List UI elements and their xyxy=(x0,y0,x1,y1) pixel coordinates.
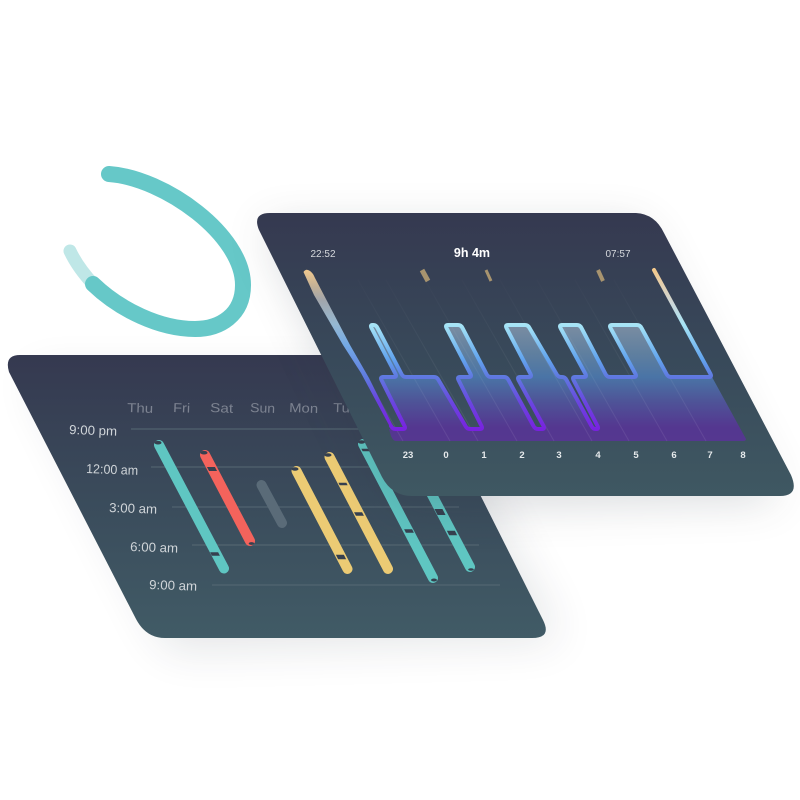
panel shadow: bottom panel xyxy=(30,375,560,650)
panel shadow: top panel xyxy=(262,225,780,510)
horizontal time grid lines xyxy=(131,429,500,585)
sleep stage area fill xyxy=(371,325,746,441)
wake time label: 07:57 xyxy=(605,249,631,260)
time axis labels: 9:00 pm xyxy=(69,422,117,439)
time axis labels: 12:00 am xyxy=(86,461,138,478)
time axis labels xyxy=(69,422,197,594)
bar: Friday red xyxy=(200,451,254,545)
awake tick marks xyxy=(422,270,603,281)
ring solid arc xyxy=(93,174,243,329)
weekday labels: Mon xyxy=(289,400,318,416)
time axis labels: 3:00 am xyxy=(109,500,157,517)
hour axis labels: 0 xyxy=(443,450,449,461)
time axis labels: 6:00 am xyxy=(130,539,178,556)
weekday labels: Thu xyxy=(127,400,153,416)
weekday labels xyxy=(127,400,358,416)
bar: Sunday grey nap xyxy=(262,485,282,523)
hour axis labels: 6 xyxy=(671,450,677,461)
icon: teal ring progress arc xyxy=(70,174,243,329)
bar: Thursday teal xyxy=(154,441,224,568)
hour axis labels xyxy=(403,450,746,461)
hour axis labels: 7 xyxy=(707,450,713,461)
bar: Wednesday teal xyxy=(358,440,437,582)
hour axis labels: 23 xyxy=(403,450,413,461)
weekday labels: Fri xyxy=(173,400,191,416)
hour axis labels: 1 xyxy=(481,450,487,461)
duration label: 9h 4m xyxy=(454,246,490,260)
hour grid lines xyxy=(311,280,706,441)
panel: nightly sleep stages xyxy=(257,213,794,496)
panel: weekly sleep schedule xyxy=(8,355,546,638)
nightly panel background xyxy=(257,213,794,496)
weekday labels: Tue xyxy=(333,400,358,416)
bar: Monday yellow xyxy=(292,467,348,569)
ring faded tail xyxy=(70,251,94,285)
hour axis labels: 8 xyxy=(740,450,746,461)
hour axis labels: 2 xyxy=(519,450,525,461)
hour axis labels: 4 xyxy=(595,450,601,461)
weekday labels: Sun xyxy=(250,400,275,416)
bar: Thursday teal right xyxy=(400,434,474,571)
bar: Tuesday yellow xyxy=(324,453,388,569)
sleep start line xyxy=(304,270,394,427)
weekday labels: Sat xyxy=(210,400,234,416)
hour axis labels: 3 xyxy=(556,450,562,461)
bedtime label: 22:52 xyxy=(310,249,336,260)
weekly panel background xyxy=(8,355,546,638)
sleep stage outline xyxy=(371,270,711,429)
hour axis labels: 5 xyxy=(633,450,639,461)
time axis labels: 9:00 am xyxy=(149,577,197,594)
